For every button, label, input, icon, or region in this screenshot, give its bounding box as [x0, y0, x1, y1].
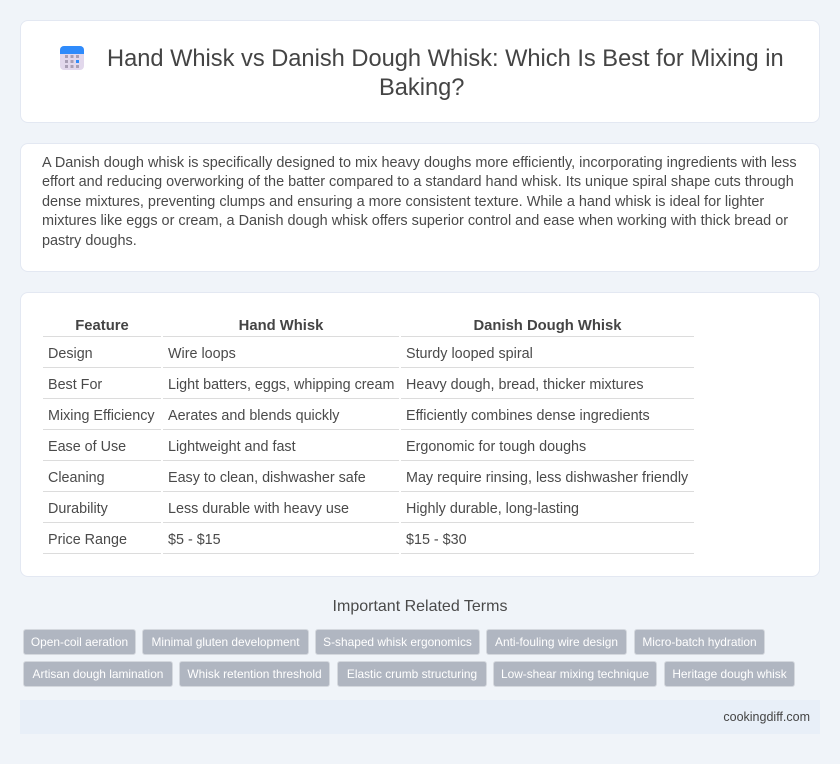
- panel: intro: [20, 143, 820, 272]
- panel: comparison table: May require rinsing, less dishwasher friendly: [406, 470, 688, 486]
- text: intro paragraph: [42, 155, 797, 249]
- tags: related terms: Artisan dough lamination: [33, 667, 163, 681]
- panel: comparison table: $5 - $15: [168, 532, 221, 548]
- panel: title header: [20, 20, 820, 123]
- panel: comparison table: [20, 292, 820, 577]
- tags: related terms: Minimal gluten development: [151, 635, 300, 649]
- icon: calendar: [60, 46, 84, 70]
- panel: comparison table: Aerates and blends quickly: [168, 408, 339, 424]
- panel: comparison table: Best For: [48, 377, 102, 393]
- panel: comparison table: Easy to clean, dishwasher safe: [168, 470, 366, 486]
- title: [107, 46, 784, 101]
- panel: comparison table: Cleaning: [48, 470, 105, 486]
- table header: feature: Feature: [75, 318, 129, 334]
- panel: comparison table: Lightweight and fast: [168, 439, 296, 455]
- text: intro paragraph: dense mixtures, preventing clumps and ensuring a more consistent texture. While a hand whisk is ideal for lighter: [42, 194, 764, 210]
- panel: comparison table: Highly durable, long-lasting: [406, 501, 579, 517]
- tags: related terms: Heritage dough whisk: [672, 667, 787, 681]
- text: intro paragraph: effort and reducing overworking of the batter compared to a standard hand whisk. Its unique spiral shape cuts through: [42, 174, 794, 190]
- panel: comparison table: Wire loops: [168, 346, 236, 362]
- panel: comparison table: Light batters, eggs, whipping cream: [168, 377, 394, 393]
- title: Baking?: [379, 75, 464, 101]
- tags: related terms: [23, 629, 795, 687]
- panel: comparison table: Durability: [48, 501, 108, 517]
- tags: related terms: Micro-batch hydration: [642, 635, 757, 649]
- text: intro paragraph: mixtures like eggs or cream, a Danish dough whisk offers superior control and ease when working with thick bread or: [42, 213, 788, 229]
- panel: comparison table: Sturdy looped spiral: [406, 346, 533, 362]
- panel: comparison table: Design: [48, 346, 93, 362]
- panel: comparison table: Mixing Efficiency: [48, 408, 155, 424]
- tags: related terms: Whisk retention threshold: [187, 667, 322, 681]
- panel: comparison table: Ease of Use: [48, 439, 126, 455]
- panel: comparison table: Less durable with heavy use: [168, 501, 349, 517]
- panel: comparison table: Heavy dough, bread, thicker mixtures: [406, 377, 644, 393]
- heading: important related terms: Important Related Terms: [333, 598, 507, 615]
- text: intro paragraph: pastry doughs.: [42, 233, 137, 249]
- footer: [20, 700, 820, 734]
- title: Hand Whisk vs Danish Dough Whisk: Which Is Best for Mixing in: [107, 46, 784, 72]
- tags: related terms: Elastic crumb structuring: [347, 667, 477, 681]
- text: source: cookingdiff.com: [723, 710, 810, 724]
- panel: comparison table: Efficiently combines dense ingredients: [406, 408, 650, 424]
- tags: related terms: Anti-fouling wire design: [495, 635, 618, 649]
- panel: comparison table: Price Range: [48, 532, 127, 548]
- table header: hand whisk: Hand Whisk: [239, 318, 323, 334]
- panel: comparison table: $15 - $30: [406, 532, 467, 548]
- tags: related terms: Low-shear mixing technique: [501, 667, 649, 681]
- tags: related terms: S-shaped whisk ergonomics: [323, 635, 472, 649]
- panel: comparison table: Ergonomic for tough doughs: [406, 439, 586, 455]
- table header: danish dough whisk: Danish Dough Whisk: [474, 318, 621, 334]
- tags: related terms: Open-coil aeration: [31, 635, 128, 649]
- text: intro paragraph: A Danish dough whisk is specifically designed to mix heavy doughs more efficiently, incorporating ingredients with less: [42, 155, 797, 171]
